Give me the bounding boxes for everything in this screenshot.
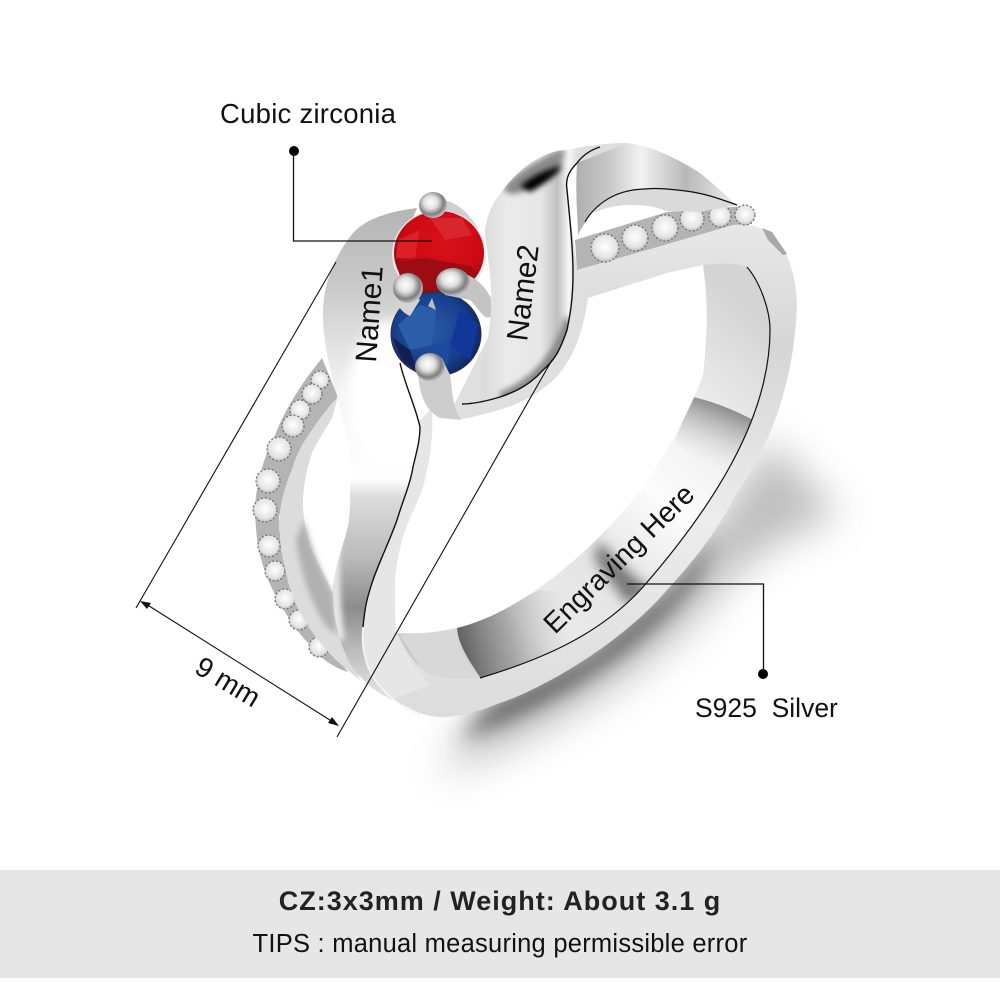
left lower band	[279, 397, 360, 680]
right leaf edge line	[462, 147, 600, 404]
inner band surface	[397, 264, 765, 678]
ring cast shadow wide	[440, 440, 840, 775]
engraving: Name1: Name1	[350, 265, 390, 363]
callout: Cubic zirconia	[220, 98, 432, 241]
dimension: 9 mm: 9 mm	[190, 651, 266, 713]
right wing lip	[578, 188, 737, 235]
left thin strip	[362, 408, 432, 700]
left lower band shading	[296, 520, 337, 635]
red gem with setting	[392, 200, 486, 302]
spec line: CZ:3x3mm / Weight: About 3.1 g	[279, 886, 721, 916]
inner band edge line	[480, 267, 770, 678]
engraving: Name2: Name2	[501, 243, 546, 343]
ring illustration	[253, 140, 797, 717]
dimension: 9 mm	[136, 262, 552, 737]
wing edge line	[585, 188, 737, 222]
ring cast shadow tight	[460, 530, 720, 740]
callout: S925 Silver	[627, 584, 838, 723]
left leaf white edge	[363, 627, 420, 715]
tips line: TIPS : manual measuring permissible error	[253, 930, 748, 958]
left leaf edge line	[363, 363, 420, 627]
prong tails	[395, 270, 491, 420]
right wing	[576, 143, 737, 235]
callout: Cubic zirconia: Cubic zirconia	[220, 98, 397, 129]
info band	[0, 870, 1000, 978]
right leaf outer crescent	[450, 180, 588, 419]
callout: S925 Silver: S925 Silver	[695, 693, 838, 723]
outer rim of band	[363, 224, 797, 717]
blue gem with setting	[391, 292, 481, 376]
right leaf panel	[485, 143, 623, 397]
left pave strip	[253, 358, 348, 672]
left leaf panel	[323, 208, 420, 686]
engraving: Engraving Here: Engraving Here	[537, 478, 701, 640]
right pave strip	[575, 205, 755, 270]
prongs	[393, 192, 470, 381]
far pave edge	[762, 228, 787, 255]
